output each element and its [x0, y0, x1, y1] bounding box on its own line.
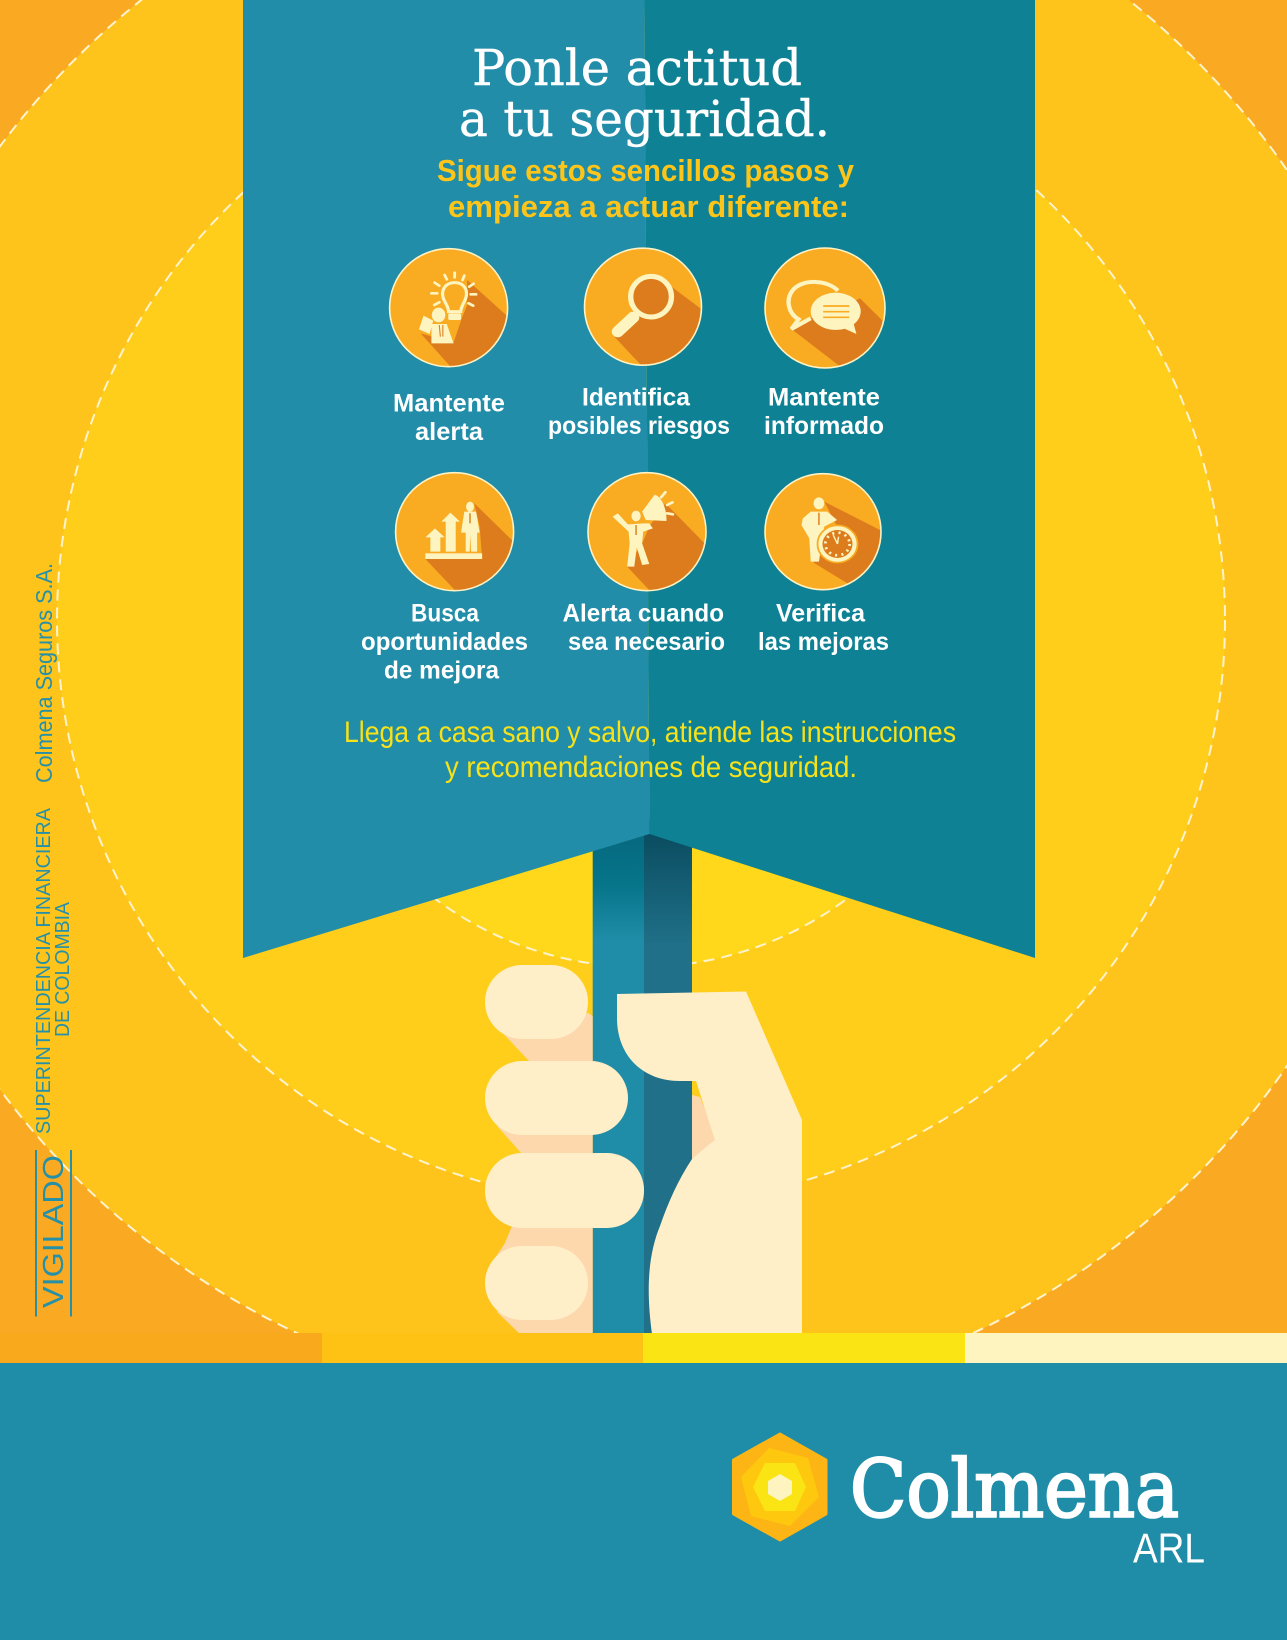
logo: Colmena ARL: Colmena — [850, 1443, 1179, 1536]
title: Ponle actitud — [472, 39, 802, 97]
title — [459, 39, 830, 148]
step labels: alerta — [415, 418, 484, 446]
icon: mantente alerta — [390, 249, 517, 370]
step labels: sea necesario — [568, 628, 725, 656]
logo: Colmena ARL: ARL — [1133, 1524, 1205, 1571]
step labels: oportunidades — [361, 628, 528, 656]
step labels: Alerta cuando — [562, 600, 724, 628]
icon: mantente informado — [765, 248, 889, 370]
icon: identifica riesgos — [584, 248, 705, 373]
title: a tu seguridad. — [459, 90, 830, 148]
pole held by the hand — [593, 820, 692, 1334]
step labels: Mantente — [768, 384, 880, 412]
logo: Colmena ARL — [734, 1434, 1205, 1571]
closing message — [344, 716, 956, 784]
step labels — [361, 384, 889, 684]
closing message: y recomendaciones de seguridad. — [445, 751, 857, 784]
step labels: Mantente — [393, 390, 505, 418]
banner — [243, 0, 1035, 958]
vigilado legal text: SUPERINTENDENCIA FINANCIERA — [33, 807, 55, 1134]
step labels: Busca — [411, 600, 480, 628]
subtitle — [437, 153, 855, 224]
step labels: posibles riesgos — [548, 412, 730, 440]
step labels: las mejoras — [758, 628, 889, 656]
vigilado legal text: DE COLOMBIA — [52, 901, 74, 1037]
step labels: Identifica — [582, 384, 691, 412]
step labels: de mejora — [384, 656, 500, 684]
step labels: Verifica — [776, 600, 866, 628]
footer band — [0, 1363, 1287, 1640]
hand illustration — [485, 965, 802, 1334]
vigilado legal text: Colmena Seguros S.A. — [31, 563, 57, 783]
icon: verifica las mejoras — [765, 474, 881, 600]
color strip — [0, 1333, 1287, 1363]
step labels: informado — [764, 412, 884, 440]
subtitle: empieza a actuar diferente: — [448, 189, 849, 224]
closing message: Llega a casa sano y salvo, atiende las instrucciones — [344, 716, 956, 749]
subtitle: Sigue estos sencillos pasos y — [437, 153, 855, 188]
icon: busca oportunidades — [396, 473, 514, 600]
icon: alerta cuando sea necesario — [588, 473, 706, 600]
vigilado legal text — [31, 563, 74, 1316]
vigilado legal text: VIGILADO — [38, 1155, 70, 1308]
